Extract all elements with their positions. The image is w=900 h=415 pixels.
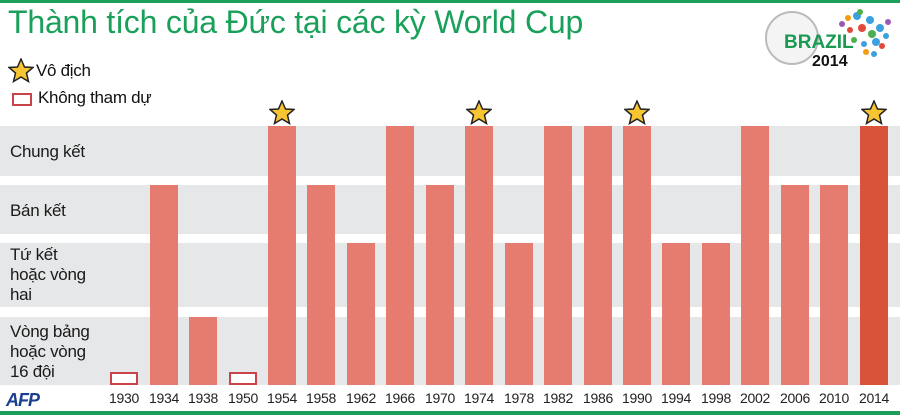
bar chart <box>109 100 889 406</box>
band: quarterfinal <box>0 243 900 307</box>
bar chart: 2014 <box>859 390 889 406</box>
band: group stage: Vòng bảng <box>10 322 90 341</box>
band: semifinal: Bán kết <box>10 201 66 220</box>
bar chart: 2002 <box>740 390 770 406</box>
legend: did not participate: Không tham dự <box>38 88 151 107</box>
bar chart: 1958 <box>306 390 336 406</box>
bar chart: 1934 <box>149 390 179 406</box>
bar chart: 1966 <box>385 390 415 406</box>
bar chart: 1974 <box>464 390 494 406</box>
band: group stage: hoặc vòng <box>10 342 86 361</box>
band: quarterfinal: Tứ kết <box>10 245 57 264</box>
bar chart: 1994 <box>661 390 691 406</box>
bar chart: 2010 <box>819 390 849 406</box>
bar chart: 1978 <box>504 390 534 406</box>
bar chart: 1954 <box>267 390 297 406</box>
legend: champion: Vô địch <box>36 61 91 80</box>
bar chart: 2006 <box>780 390 810 406</box>
title: Thành tích của Đức tại các kỳ World Cup <box>8 4 583 40</box>
bar chart: 1970 <box>425 390 455 406</box>
band: final: Chung kết <box>10 142 85 161</box>
band: final <box>0 126 900 176</box>
AFP logo: AFP <box>6 390 39 410</box>
bar chart: 1982 <box>543 390 573 406</box>
band: group stage: 16 đội <box>10 362 55 381</box>
bar chart: 1950 <box>228 390 258 406</box>
logo: Brazil 2014 <box>765 9 891 68</box>
band: quarterfinal: hoặc vòng <box>10 265 86 284</box>
bar chart: 1930 <box>109 390 139 406</box>
bar chart: 1990 <box>622 390 652 406</box>
logo: Brazil 2014: BRAZIL <box>784 32 854 53</box>
bar chart: 1938 <box>188 390 218 406</box>
band: semifinal <box>0 185 900 234</box>
band: quarterfinal: hai <box>10 285 32 304</box>
bar chart: 1986 <box>583 390 613 406</box>
legend: champion <box>8 58 91 83</box>
band: group stage <box>0 317 900 385</box>
bar chart: 1998 <box>701 390 731 406</box>
bar chart: 1962 <box>346 390 376 406</box>
